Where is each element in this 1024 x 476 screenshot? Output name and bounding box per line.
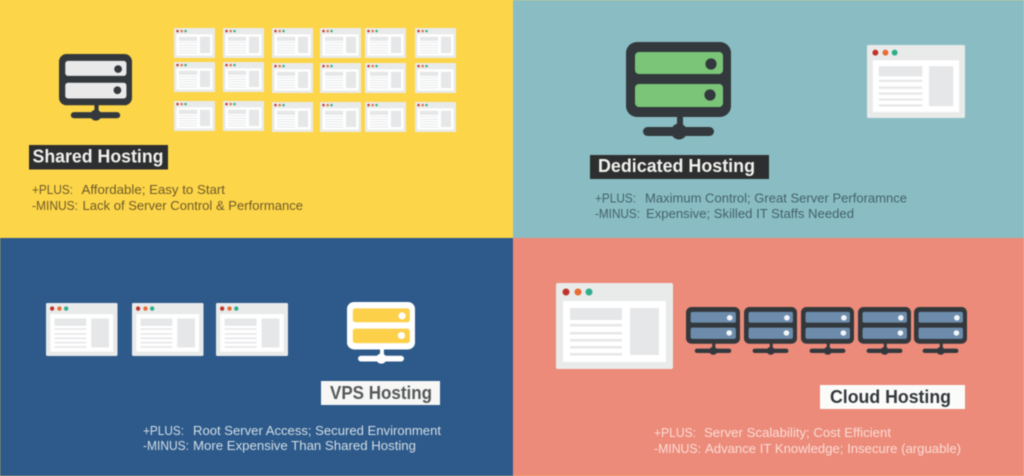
text: cloud hosting pros and cons: +PLUS: <box>654 426 696 440</box>
window row 3 <box>174 101 456 132</box>
text: cloud hosting pros and cons: Advance IT Knowledge; Insecure (arguable) <box>705 442 961 456</box>
heading: cloud hosting: Cloud Hosting <box>830 387 951 407</box>
text: dedicated hosting pros and cons <box>595 192 907 221</box>
text: vps hosting pros and cons: +PLUS: <box>143 424 184 438</box>
panel: shared hosting <box>0 0 513 238</box>
icon: vps server <box>347 302 415 364</box>
panel: cloud hosting <box>513 238 1024 476</box>
heading: dedicated hosting: Dedicated Hosting <box>598 156 755 176</box>
panel: dedicated hosting <box>513 0 1024 238</box>
text: dedicated hosting pros and cons: +PLUS: <box>595 192 636 206</box>
text: dedicated hosting pros and cons: -MINUS: <box>595 207 640 221</box>
heading: shared hosting: Shared Hosting <box>32 146 164 166</box>
website window <box>867 45 965 118</box>
icons: five cloud servers <box>686 307 967 355</box>
text: vps hosting pros and cons: More Expensive Than Shared Hosting <box>193 439 416 453</box>
text: vps hosting pros and cons <box>143 424 442 453</box>
icon: shared hosting server <box>59 54 132 121</box>
website window <box>556 283 673 369</box>
text: cloud hosting pros and cons: Server Scalability; Cost Efficient <box>704 426 892 440</box>
window row 1 <box>174 28 456 58</box>
heading: vps hosting: VPS Hosting <box>330 383 432 403</box>
icon: dedicated server <box>626 42 731 140</box>
text: vps hosting pros and cons: Root Server Access; Secured Environment <box>193 424 442 438</box>
website window grid: eighteen shared sites <box>174 28 456 132</box>
text: shared hosting pros and cons: +PLUS: <box>32 183 73 197</box>
text: dedicated hosting pros and cons: Expensive; Skilled IT Staffs Needed <box>646 207 854 221</box>
text: cloud hosting pros and cons <box>654 426 961 456</box>
text: vps hosting pros and cons: -MINUS: <box>143 439 189 453</box>
panel: vps hosting <box>0 238 513 476</box>
window row 2 <box>174 62 456 93</box>
text: dedicated hosting pros and cons: Maximum Control; Great Server Perforamnce <box>645 192 907 206</box>
text: cloud hosting pros and cons: -MINUS: <box>654 442 701 456</box>
text: shared hosting pros and cons: -MINUS: <box>32 199 78 213</box>
text: shared hosting pros and cons: Lack of Server Control & Performance <box>82 199 303 213</box>
website windows: three virtual sites <box>46 303 288 356</box>
text: shared hosting pros and cons <box>32 183 303 213</box>
text: shared hosting pros and cons: Affordable; Easy to Start <box>82 183 226 197</box>
